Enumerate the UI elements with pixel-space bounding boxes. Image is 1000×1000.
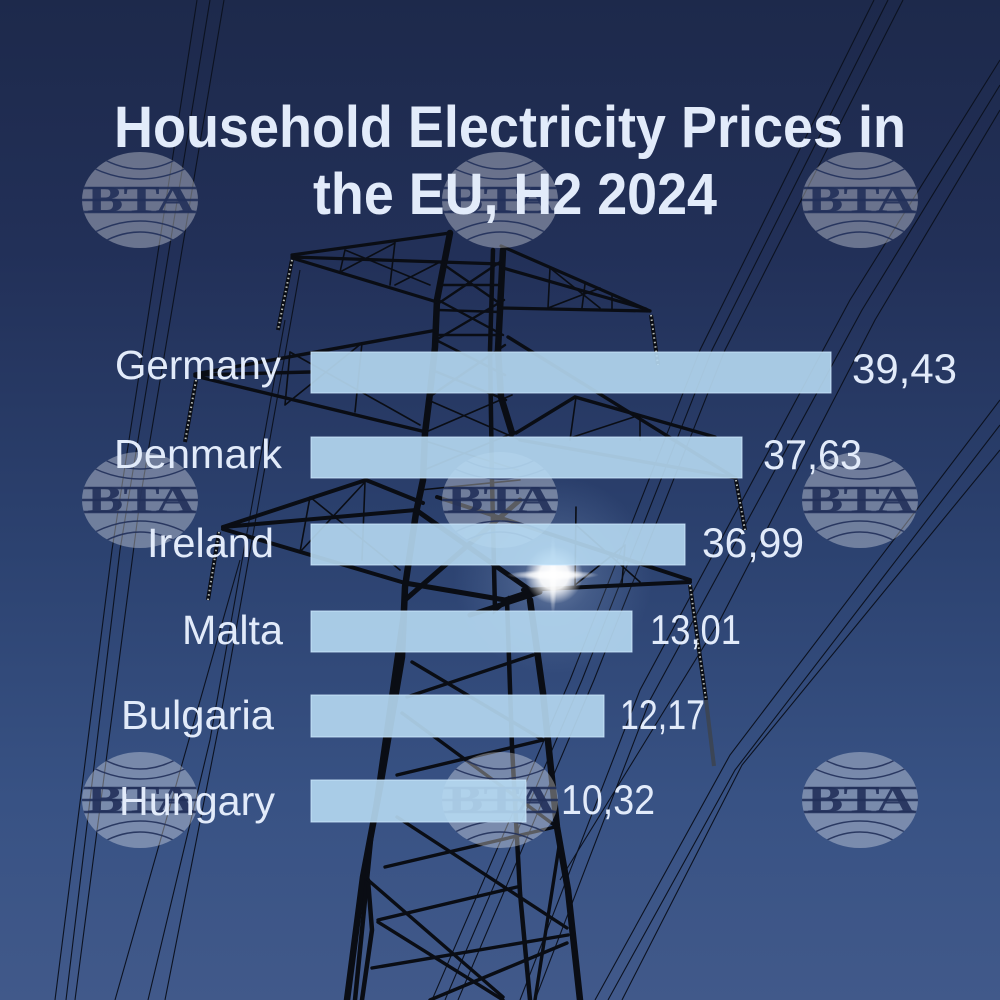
insulator strings: [185, 260, 745, 700]
sun core and rays: [507, 535, 599, 615]
central joint near sun: [405, 500, 540, 615]
title: Household Electricity Prices in: [114, 95, 906, 160]
value labels: 12,17: [620, 691, 705, 738]
value labels: 39,43: [852, 345, 957, 392]
title: [114, 95, 906, 227]
tower head lattice: [432, 262, 506, 400]
second arm lacing: [285, 343, 640, 490]
country labels: Germany: [115, 342, 281, 388]
value labels: 37,63: [763, 431, 862, 478]
country labels: Ireland: [147, 520, 274, 566]
top arm: [292, 233, 650, 311]
bar: Bulgaria: [311, 695, 604, 737]
bar: Ireland: [311, 524, 685, 565]
bar: Malta: [311, 611, 632, 652]
second arm: [195, 330, 736, 478]
bar: Germany: [311, 352, 831, 393]
bar chart: [311, 352, 831, 822]
value labels: 10,32: [561, 776, 655, 823]
country labels: Denmark: [114, 431, 282, 477]
value labels: [561, 345, 957, 823]
sun halo: [453, 475, 653, 675]
country labels: Hungary: [119, 778, 275, 824]
country labels: Malta: [182, 607, 283, 653]
country labels: Bulgaria: [121, 692, 274, 738]
value labels: 13,01: [650, 606, 741, 653]
value labels: 36,99: [702, 519, 804, 566]
electricity pylon silhouette: [195, 233, 736, 1000]
bar: Denmark: [311, 437, 742, 478]
BTA watermark grid: [82, 152, 918, 848]
lower lattice: [368, 655, 568, 1000]
third arm: [223, 480, 690, 590]
bar: Hungary: [311, 780, 526, 822]
top arm lacing: [340, 242, 612, 309]
main legs: [347, 233, 580, 1000]
country labels: [114, 342, 283, 824]
third arm lacing: [300, 482, 640, 585]
title: the EU, H2 2024: [313, 162, 717, 227]
insulator end: [706, 700, 714, 766]
